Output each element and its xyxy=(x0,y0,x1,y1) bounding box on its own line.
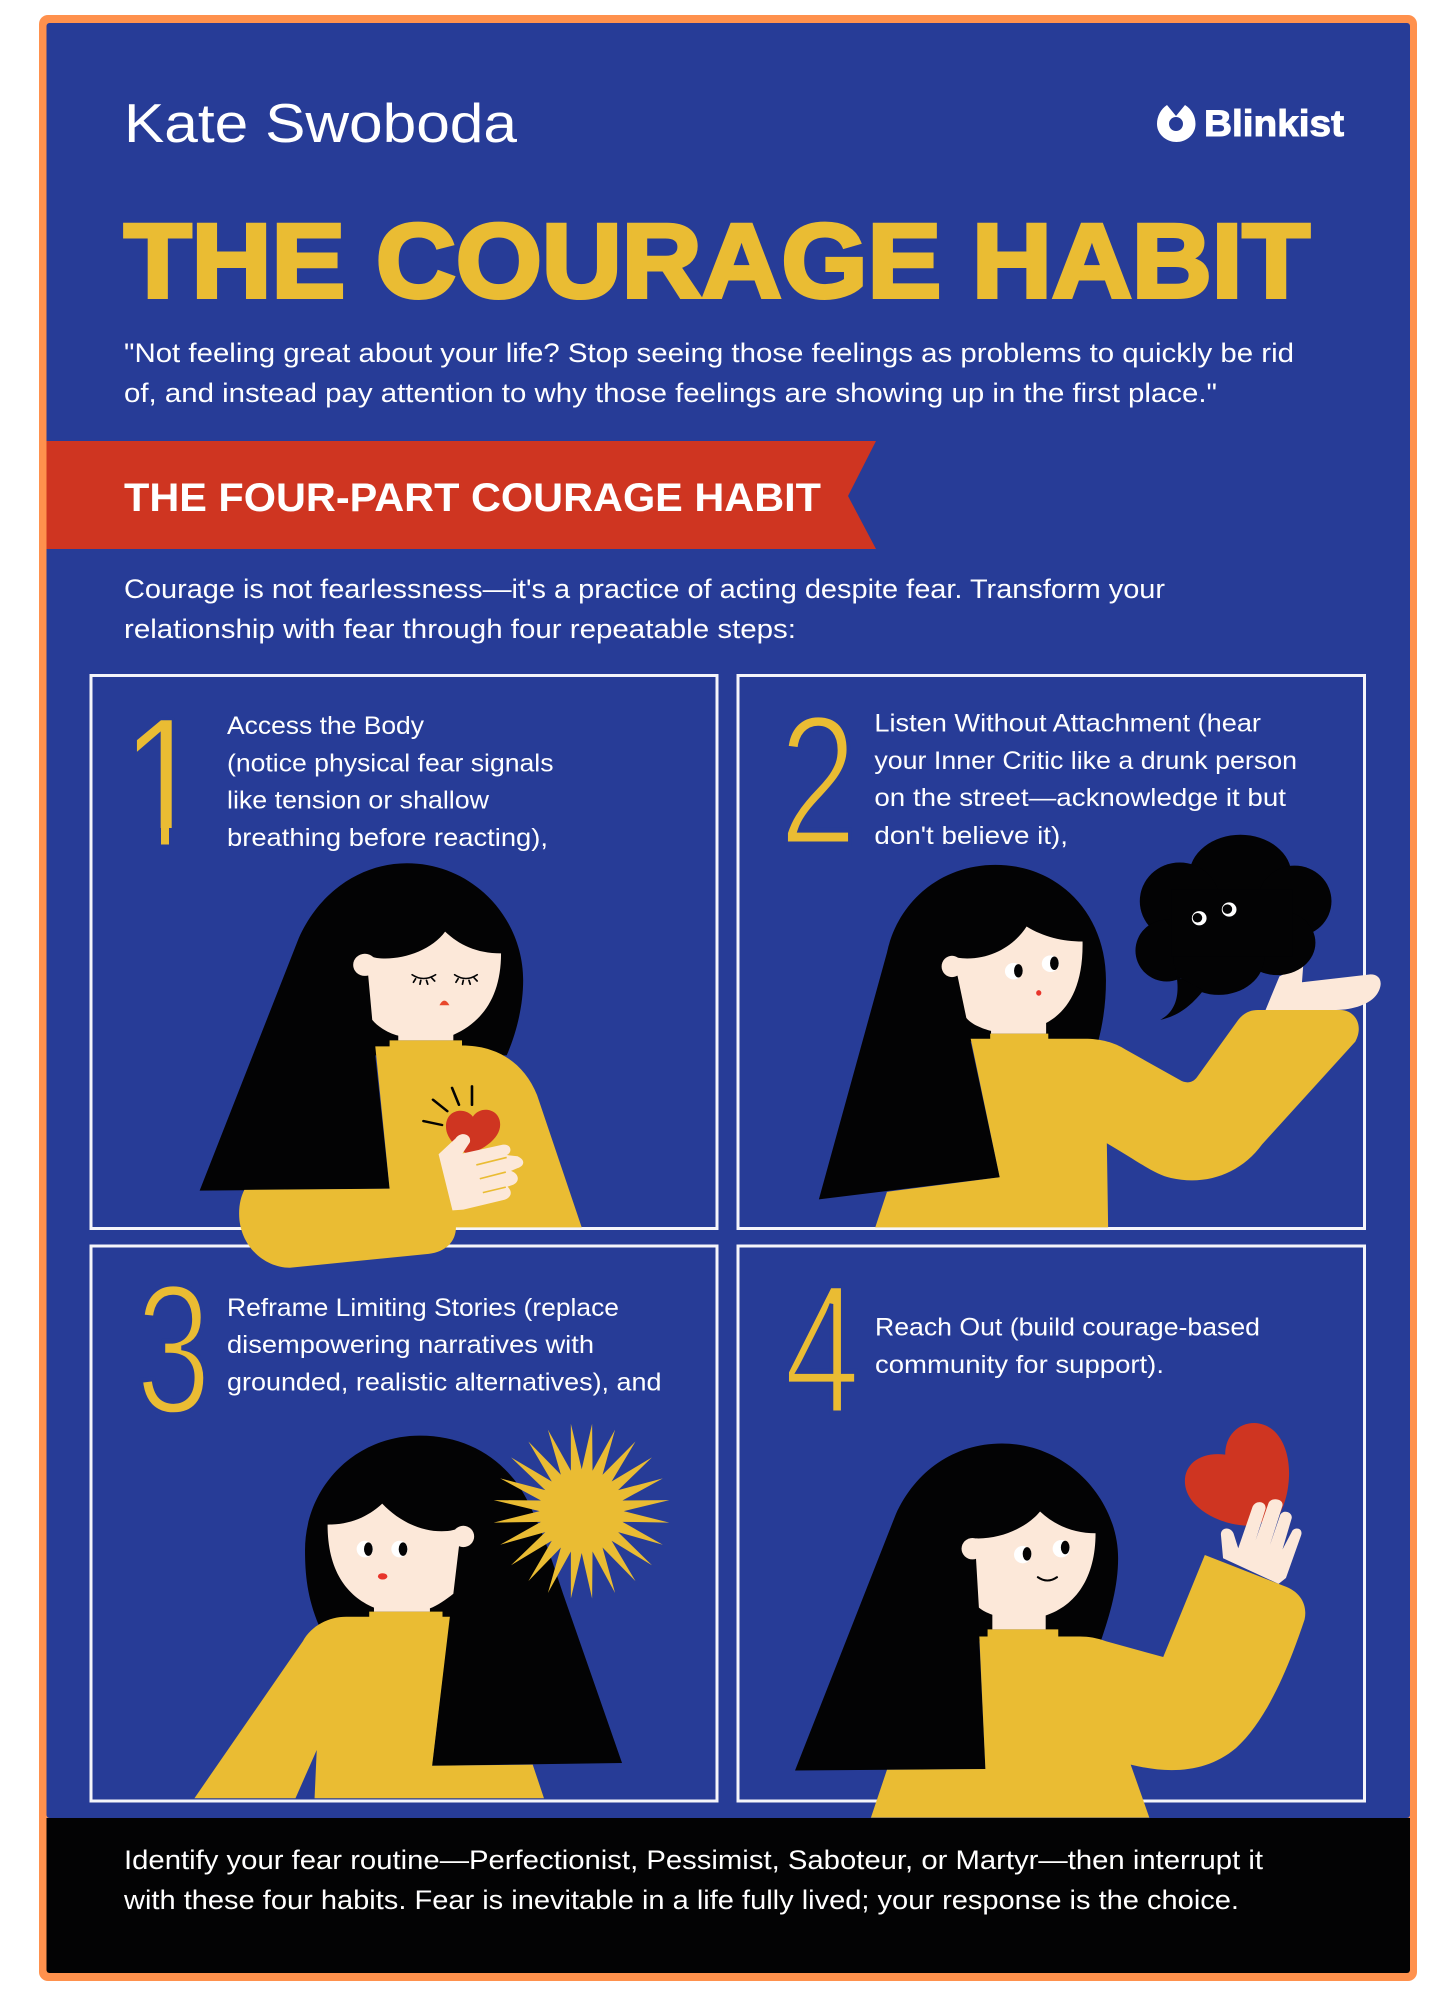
logo: Blinkist: Blinkist xyxy=(1204,103,1344,144)
panel 4: reach out: Reach Out (build courage-based xyxy=(875,1314,1260,1342)
intro text: Courage is not fearlessness—it's a practice of acting despite fear. Transform your xyxy=(124,574,1165,604)
panel 4: reach out: community for support). xyxy=(875,1351,1164,1379)
panel 1: access the body: breathing before reacting), xyxy=(227,824,548,852)
illustration: woman holding heart xyxy=(795,1423,1305,1818)
title: THE COURAGE HABIT xyxy=(124,203,1310,320)
panel 3: reframe stories: disempowering narratives with xyxy=(227,1331,594,1359)
author name: Kate Swoboda xyxy=(124,92,517,154)
panel 3: reframe stories: grounded, realistic alternatives), and xyxy=(227,1368,662,1396)
panel 4: reach out xyxy=(738,1246,1364,1818)
panel 3: reframe stories: 3 xyxy=(136,1247,211,1453)
panel 2: listen without attachment: Listen Without Attachment (hear xyxy=(874,710,1261,738)
ribbon heading: THE FOUR-PART COURAGE HABIT xyxy=(124,476,821,520)
footer band xyxy=(46,1818,1410,1973)
quote: "Not feeling great about your life? Stop seeing those feelings as problems to quickly be rid xyxy=(124,338,1294,368)
panel 1: access the body: (notice physical fear signals xyxy=(227,750,554,778)
illustration: woman with hand on heart xyxy=(200,863,582,1268)
panel 1: access the body: Access the Body xyxy=(227,712,425,740)
panel 2: listen without attachment xyxy=(738,676,1381,1228)
panel 1: access the body: 1 xyxy=(121,680,206,886)
quote xyxy=(124,338,1294,408)
panel 1: access the body xyxy=(91,676,717,1268)
panel 2: listen without attachment: on the street—acknowledge it but xyxy=(874,784,1286,812)
panel 2: listen without attachment: don't believe it), xyxy=(874,822,1068,850)
icon: inner critic cloud xyxy=(1135,835,1331,1020)
illustration: woman with sunburst xyxy=(194,1424,669,1798)
panel 3: reframe stories xyxy=(91,1246,717,1801)
intro text: relationship with fear through four repeatable steps: xyxy=(124,614,796,644)
footer band: Identify your fear routine—Perfectionist, Pessimist, Saboteur, or Martyr—then interrupt it xyxy=(124,1845,1264,1875)
panel 3: reframe stories: Reframe Limiting Stories (replace xyxy=(227,1294,619,1322)
ribbon heading xyxy=(46,441,876,549)
intro text xyxy=(124,574,1165,644)
panel 4: reach out: 4 xyxy=(784,1247,860,1453)
panel 1: access the body: like tension or shallow xyxy=(227,787,490,815)
footer band: with these four habits. Fear is inevitable in a life fully lived; your response is the choice. xyxy=(123,1885,1239,1915)
quote: of, and instead pay attention to why those feelings are showing up in the first place." xyxy=(124,378,1217,408)
illustration: woman with speech cloud xyxy=(819,835,1381,1227)
panel 2: listen without attachment: your Inner Critic like a drunk person xyxy=(874,747,1297,775)
panel 2: listen without attachment: 2 xyxy=(779,678,857,884)
